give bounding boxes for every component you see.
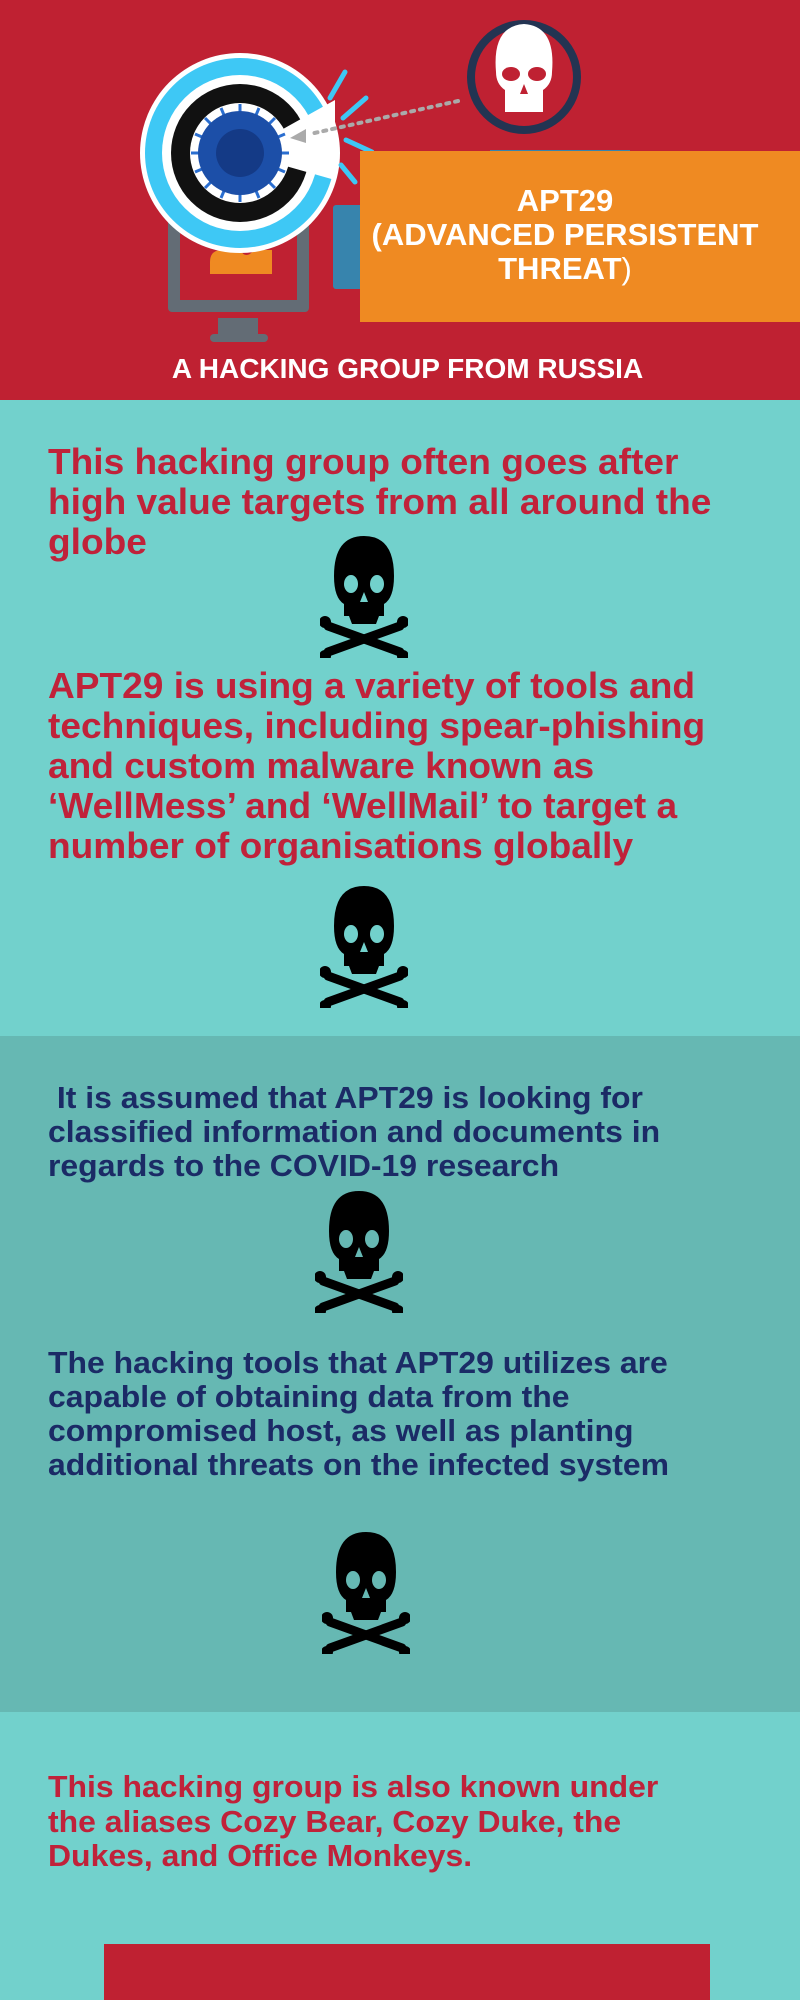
title box: THREAT) (498, 251, 632, 286)
text block 4: capable of obtaining data from the (48, 1379, 570, 1414)
header illustration (140, 20, 630, 342)
icon: skull and crossbones 1 (320, 536, 408, 658)
icon: target with virus (140, 53, 372, 253)
text block 4: The hacking tools that APT29 utilizes are (48, 1345, 668, 1380)
header banner (0, 0, 800, 400)
icon: skull and crossbones 3 (315, 1191, 403, 1313)
text block 1: This hacking group often goes after (48, 441, 678, 482)
icon: grey monitor (168, 204, 309, 342)
text block 2: number of organisations globally (48, 825, 633, 866)
text block 3: It is assumed that APT29 is looking for (57, 1080, 643, 1115)
icon: skull badge (467, 20, 581, 134)
title box (360, 151, 770, 322)
text block 2: and custom malware known as (48, 745, 594, 786)
title box: APT29 (517, 183, 613, 218)
text block 1: high value targets from all around the (48, 481, 711, 522)
panel: section 1 (0, 400, 800, 1036)
panel: section 3 (0, 1712, 800, 2000)
text block 3: regards to the COVID-19 research (48, 1148, 559, 1183)
title box: (ADVANCED PERSISTENT (372, 217, 758, 252)
arrow: dotted line from skull to target (290, 101, 458, 143)
panel: section 2 (0, 1036, 800, 1712)
footer red box (104, 1944, 710, 2000)
text block 2: ‘WellMess’ and ‘WellMail’ to target a (48, 785, 677, 826)
text block 3 (48, 1080, 660, 1183)
text block 3: classified information and documents in (48, 1114, 660, 1149)
icon: blue monitor (333, 150, 630, 289)
subtitle: A HACKING GROUP FROM RUSSIA (172, 353, 643, 384)
text block 4 (48, 1345, 669, 1482)
text block 5: This hacking group is also known under (48, 1769, 658, 1804)
text block 4: compromised host, as well as planting (48, 1413, 634, 1448)
text block 4: additional threats on the infected system (48, 1447, 669, 1482)
text block 5 (48, 1769, 658, 1873)
text block 2: APT29 is using a variety of tools and (48, 665, 695, 706)
text block 5: Dukes, and Office Monkeys. (48, 1838, 472, 1873)
text block 1 (48, 441, 711, 562)
text block 2: techniques, including spear-phishing (48, 705, 705, 746)
text block 1: globe (48, 521, 147, 562)
text block 5: the aliases Cozy Bear, Cozy Duke, the (48, 1804, 621, 1838)
icon: skull and crossbones 4 (322, 1532, 410, 1654)
icon: skull and crossbones 2 (320, 886, 408, 1008)
text block 2 (48, 665, 705, 866)
